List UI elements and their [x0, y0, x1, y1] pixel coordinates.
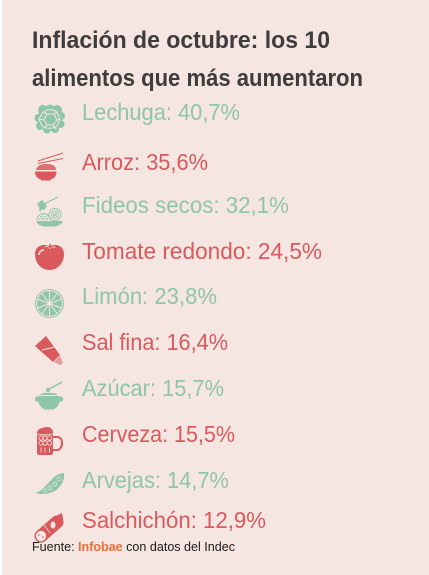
title: Inflación de octubre: los 10 [32, 27, 330, 54]
label: Arvejas: 14,7% [82, 467, 229, 493]
row: Arvejas [36, 467, 229, 494]
row: Tomate redondo [35, 238, 322, 270]
row: Sal fina [35, 329, 228, 365]
row: Limón [35, 283, 217, 318]
label: Sal fina: 16,4% [82, 329, 228, 355]
row: Azúcar [35, 375, 224, 410]
label: Tomate redondo: 24,5% [82, 238, 322, 264]
source note: Fuente: Infobae con datos del Indec [32, 540, 235, 554]
icon: lemon slice [35, 289, 64, 318]
row: Cerveza [37, 421, 235, 455]
icon: rice bowl with chopsticks [35, 153, 63, 180]
label: Limón: 23,8% [82, 283, 217, 309]
row: Arroz [35, 149, 208, 180]
label: Fideos secos: 32,1% [82, 192, 289, 218]
label: Lechuga: 40,7% [82, 99, 240, 125]
icon: salt shaker [35, 336, 63, 365]
icon: tomato [35, 242, 64, 270]
label: Arroz: 35,6% [82, 149, 208, 175]
icon: sugar bowl with spoon [35, 382, 63, 410]
icon: beer mug [37, 427, 62, 455]
icon: noodles bowl [36, 197, 63, 226]
icon: pea pod [36, 473, 64, 494]
icon: salami [35, 513, 63, 542]
title [32, 27, 363, 92]
label: Azúcar: 15,7% [82, 375, 224, 401]
row: Salchichón [35, 507, 266, 542]
label: Salchichón: 12,9% [82, 507, 266, 533]
title: alimentos que más aumentaron [32, 65, 363, 92]
icon: lettuce [34, 104, 65, 134]
label: Cerveza: 15,5% [82, 421, 235, 447]
row: Lechuga [34, 99, 240, 134]
row: Fideos secos [36, 192, 289, 226]
